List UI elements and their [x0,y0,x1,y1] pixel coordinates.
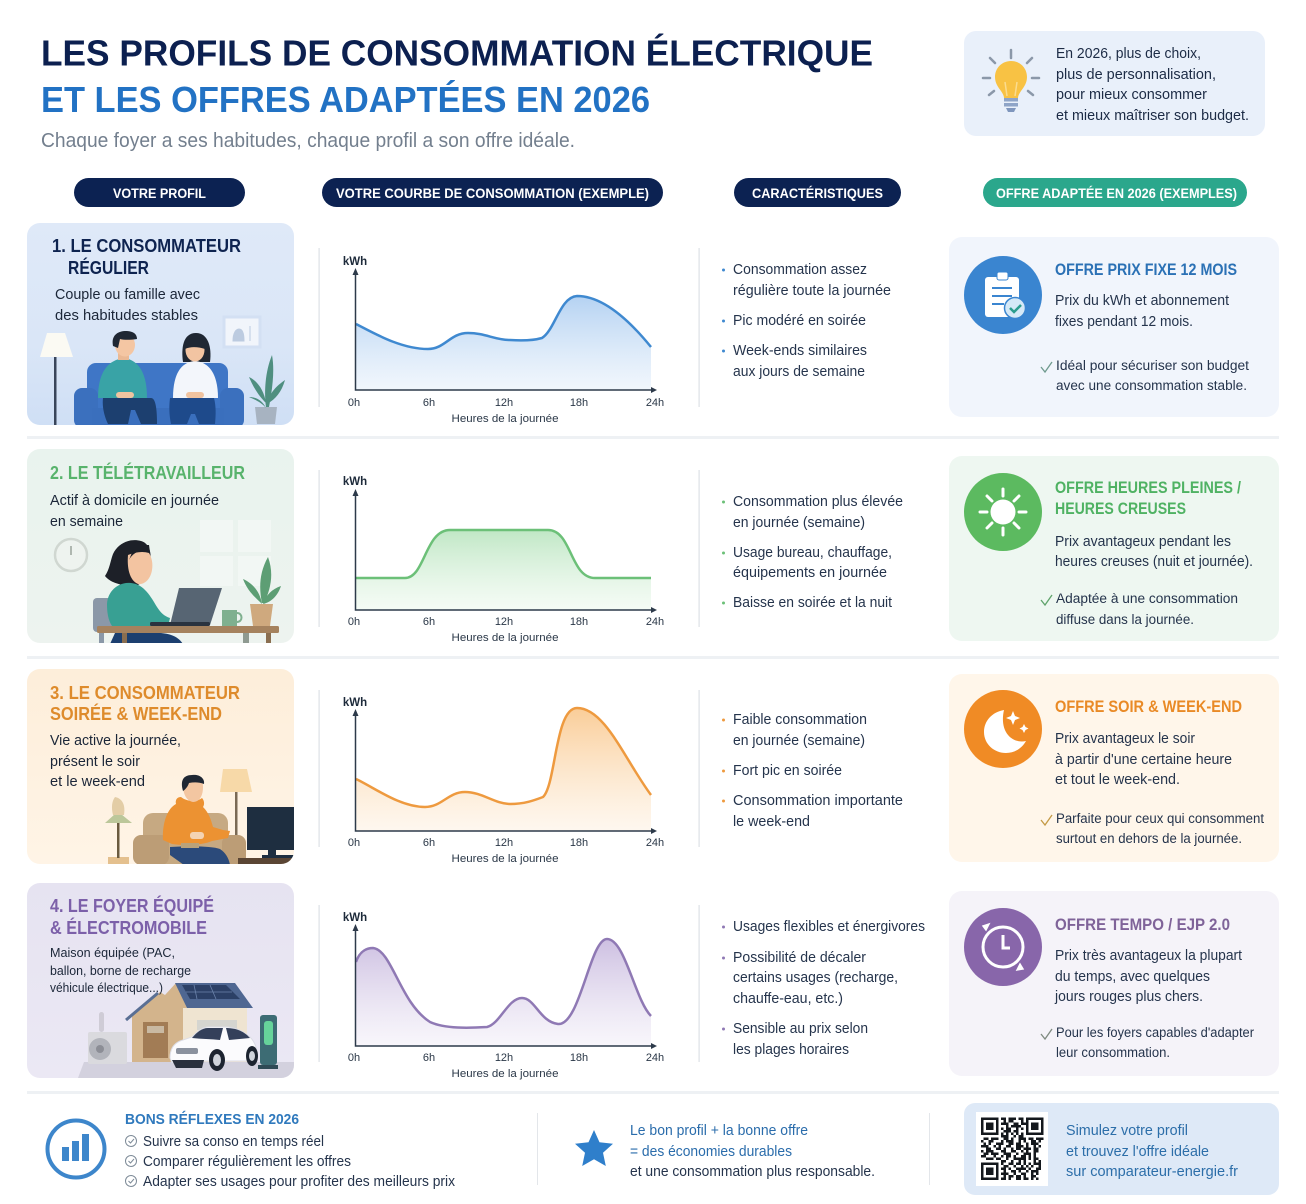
icon: light bulb [983,50,1039,112]
icon: QR code [976,1112,1048,1186]
offre 2 text [1041,479,1253,627]
chart 4: 24h [646,1052,664,1064]
profil 2 text: en semaine [50,514,123,530]
offre 4 text: OFFRE TEMPO / EJP 2.0 [1055,916,1230,934]
callout text: pour mieux consommer [1056,87,1207,103]
panel: profil 1 [27,223,294,428]
bons réflexes: BONS RÉFLEXES EN 2026 [125,1111,299,1128]
panel: offre prix fixe [949,237,1279,417]
profil 1 text: des habitudes stables [55,308,198,324]
column header: caractéristiques [734,178,901,207]
column header: votre profil: VOTRE PROFIL [113,186,206,201]
subtitle: Chaque foyer a ses habitudes, chaque profil a son offre idéale. [41,130,575,152]
icon: moon [964,690,1042,768]
caractéristiques 4: les plages horaires [733,1042,849,1058]
profil 1 text: RÉGULIER [68,257,149,278]
profil 2 text: Actif à domicile en journée [50,493,219,509]
caractéristiques 2: en journée (semaine) [733,515,865,531]
profil 4 text: véhicule électrique...) [50,981,163,995]
profil 1 text: 1. LE CONSOMMATEUR [52,236,241,256]
offre 3 text: à partir d'une certaine heure [1055,752,1232,768]
message: bon profil: Le bon profil + la bonne offre [630,1123,808,1139]
chart 4: 18h [570,1052,588,1064]
callout text: En 2026, plus de choix, [1056,46,1201,62]
profil 4 text: & ÉLECTROMOBILE [50,917,207,938]
chart 1: Heures de la journée [452,413,558,425]
chart 3: Heures de la journée [452,853,558,865]
caractéristiques 2: Usage bureau, chauffage, [733,545,892,561]
caractéristiques 2: Baisse en soirée et la nuit [733,595,892,611]
offre 2 text: Prix avantageux pendant les [1055,534,1231,550]
panel: offre soir et week-end [949,674,1279,862]
title: LES PROFILS DE CONSOMMATION ÉLECTRIQUE [41,32,873,74]
offre 3 text: et tout le week-end. [1055,772,1180,788]
profil 1 text [52,236,241,324]
caractéristiques 3: Faible consommation [733,712,867,728]
chart 2 [343,476,664,644]
offre 4 text [1041,916,1254,1060]
offre 2 text: Adaptée à une consommation [1056,591,1238,606]
offre 2 text: HEURES CREUSES [1055,500,1186,518]
chart 4 [343,912,664,1080]
illustration: couple sur canapé [40,317,285,428]
offre 3 text [1041,698,1264,846]
chart 2: kWh [343,476,367,488]
callout: 2026 [964,31,1265,136]
profil 2 text [50,462,245,530]
chart 2: 18h [570,616,588,628]
caractéristiques 3: Consommation importante [733,793,903,809]
caractéristiques 4 [722,919,925,1058]
caractéristiques 1: régulière toute la journée [733,283,891,299]
panel: simulateur QR [964,1103,1279,1195]
caractéristiques 3: Fort pic en soirée [733,763,842,779]
chart 2: 0h [348,616,360,628]
caractéristiques 2: équipements en journée [733,565,887,581]
offre 1 text: OFFRE PRIX FIXE 12 MOIS [1055,261,1237,279]
offre 3 text: surtout en dehors de la journée. [1056,831,1242,846]
title [41,32,873,120]
offre 1 text: avec une consommation stable. [1056,378,1247,393]
profil 4 text: 4. LE FOYER ÉQUIPÉ [50,895,214,916]
column header: caractéristiques: CARACTÉRISTIQUES [752,186,883,201]
caractéristiques 3: le week-end [733,814,810,830]
icon: graphique bons réflexes [48,1120,104,1178]
column header: votre profil [74,178,245,207]
caractéristiques 3: en journée (semaine) [733,733,865,749]
offre 4 text: du temps, avec quelques [1055,969,1210,985]
QR text: Simulez votre profil [1066,1123,1188,1139]
profil 4 text: Maison équipée (PAC, [50,946,175,960]
callout text [1056,46,1249,124]
caractéristiques 1: Week-ends similaires [733,343,867,359]
chart 4: Heures de la journée [452,1068,558,1080]
chart 4: kWh [343,912,367,924]
column header: offre [983,178,1247,207]
caractéristiques 1: Pic modéré en soirée [733,313,866,329]
chart 2: 6h [423,616,435,628]
column header: courbe [322,178,663,207]
chart 1: 18h [570,397,588,409]
illustration: soirée [105,769,298,865]
profil 3 text: 3. LE CONSOMMATEUR [50,683,240,703]
chart 3: 24h [646,837,664,849]
chart 3: 18h [570,837,588,849]
title: ET LES OFFRES ADAPTÉES EN 2026 [41,79,650,120]
offre 4 text: Prix très avantageux la plupart [1055,948,1242,964]
column header: offre: OFFRE ADAPTÉE EN 2026 (EXEMPLES) [996,186,1237,201]
illustration: télétravail [54,538,281,643]
caractéristiques 4: Sensible au prix selon [733,1021,868,1037]
profil 3 text [50,683,240,790]
chart 1: 0h [348,397,360,409]
chart 3: 0h [348,837,360,849]
chart 1: 6h [423,397,435,409]
offre 1 text: Idéal pour sécuriser son budget [1056,358,1249,373]
column header: courbe: VOTRE COURBE DE CONSOMMATION (EXEMPLE) [336,186,649,201]
chart 3 [343,697,664,865]
profil 3 text: SOIRÉE & WEEK-END [50,703,222,724]
chart 4: 12h [495,1052,513,1064]
offre 2 text: diffuse dans la journée. [1056,612,1194,627]
offre 3 text: Prix avantageux le soir [1055,731,1195,747]
callout text: plus de personnalisation, [1056,67,1216,83]
caractéristiques 4: certains usages (recharge, [733,970,898,986]
caractéristiques 2 [722,494,903,611]
icon: étoile [575,1130,613,1166]
offre 2 text: OFFRE HEURES PLEINES / [1055,479,1241,497]
chart 4: 6h [423,1052,435,1064]
chart 3: 12h [495,837,513,849]
offre 1 text: Prix du kWh et abonnement [1055,293,1229,309]
profil 2 text: 2. LE TÉLÉTRAVAILLEUR [50,462,245,483]
profil 4 text: ballon, borne de recharge [50,964,191,978]
caractéristiques 1: Consommation assez [733,262,867,278]
profil 3 text: Vie active la journée, [50,733,181,749]
chart 1 [343,256,664,425]
caractéristiques 4: chauffe-eau, etc.) [733,991,843,1007]
bons réflexes: Suivre sa conso en temps réel [143,1134,324,1150]
caractéristiques 2: Consommation plus élevée [733,494,903,510]
panel: offre heures pleines [949,456,1279,641]
chart 1: 12h [495,397,513,409]
chart 3: 6h [423,837,435,849]
profil 4 text [50,895,214,995]
chart 2: Heures de la journée [452,632,558,644]
chart 2: 24h [646,616,664,628]
panel: profil 3 [27,669,298,865]
caractéristiques 3 [722,712,903,830]
bons réflexes: Adapter ses usages pour profiter des meilleurs prix [143,1174,456,1190]
chart 2: 12h [495,616,513,628]
caractéristiques 1: aux jours de semaine [733,364,865,380]
callout text: et mieux maîtriser son budget. [1056,108,1249,124]
caractéristiques 1 [722,262,891,380]
message: bon profil: = des économies durables [630,1144,792,1160]
panel: offre tempo [949,891,1279,1076]
profil 1 text: Couple ou famille avec [55,287,200,303]
bons réflexes: Comparer régulièrement les offres [143,1154,351,1170]
QR text: sur comparateur-energie.fr [1066,1164,1238,1180]
QR text [1066,1123,1238,1180]
offre 3 text: OFFRE SOIR & WEEK-END [1055,698,1242,716]
profil 3 text: et le week-end [50,774,145,790]
icon: sun [964,473,1042,551]
chart 4: 0h [348,1052,360,1064]
offre 2 text: heures creuses (nuit et journée). [1055,554,1253,570]
bons réflexes [125,1111,456,1190]
message: bon profil [630,1123,875,1180]
chart 1: kWh [343,256,367,268]
offre 3 text: Parfaite pour ceux qui consomment [1056,811,1264,826]
offre 4 text: Pour les foyers capables d'adapter [1056,1025,1254,1040]
illustration: maison, voiture, borne [78,983,294,1078]
profil 3 text: présent le soir [50,754,140,770]
offre 1 text: fixes pendant 12 mois. [1055,314,1193,330]
icon: clock [964,908,1042,986]
icon: clipboard [964,256,1042,334]
QR text: et trouvez l'offre idéale [1066,1144,1209,1160]
panel: profil 2 [27,449,294,644]
message: bon profil: et une consommation plus responsable. [630,1164,875,1180]
panel: profil 4 [27,883,294,1078]
chart 3: kWh [343,697,367,709]
offre 4 text: leur consommation. [1056,1045,1170,1060]
caractéristiques 4: Usages flexibles et énergivores [733,919,925,935]
chart 1: 24h [646,397,664,409]
offre 4 text: jours rouges plus chers. [1054,989,1203,1005]
offre 1 text [1041,261,1249,393]
caractéristiques 4: Possibilité de décaler [733,950,866,966]
